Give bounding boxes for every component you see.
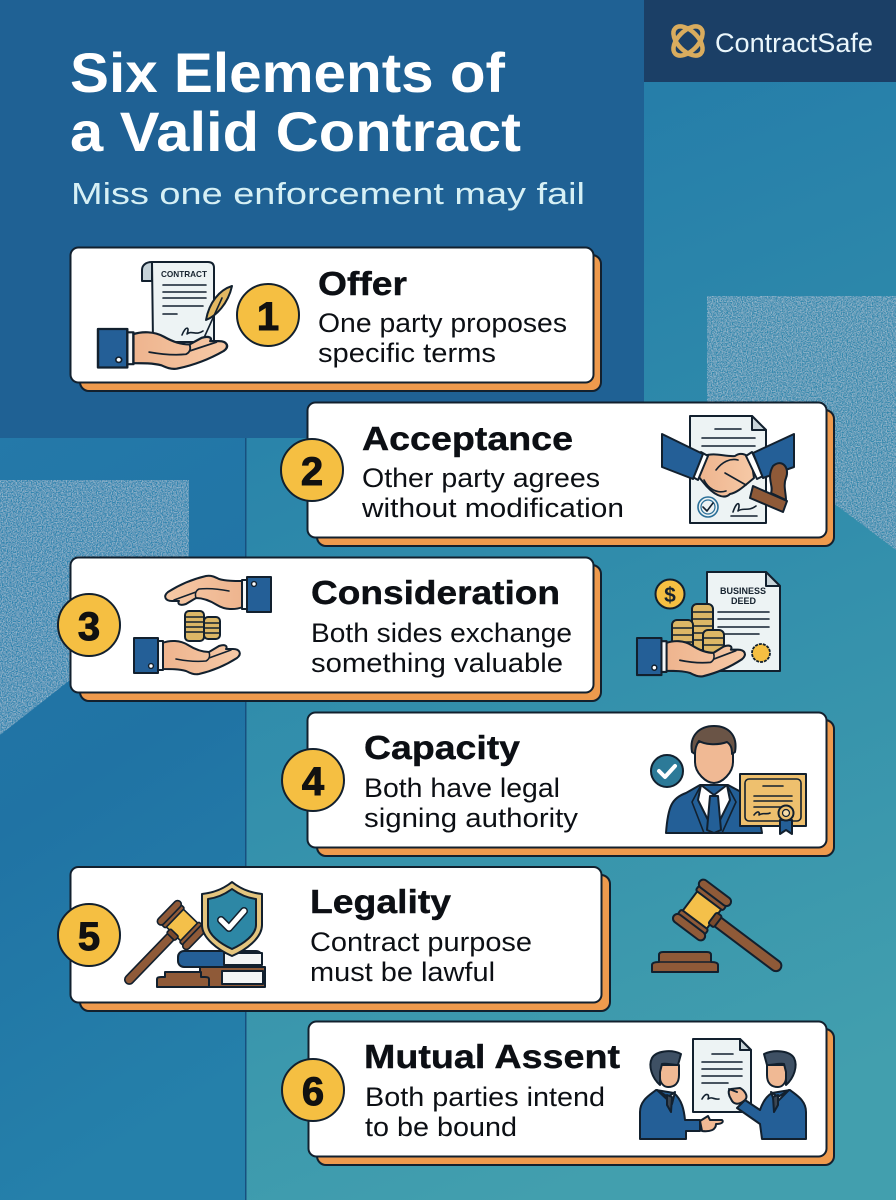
panel: 5 Legality — [58, 867, 610, 1011]
title — [70, 41, 521, 163]
number badge 3: 3 — [78, 605, 100, 649]
text: Consideration: Both sides exchange — [311, 618, 572, 648]
text: Capacity: signing authority — [364, 803, 579, 833]
logo wordmark: ContractSafe — [715, 28, 873, 58]
text: Capacity: Both have legal — [364, 773, 560, 803]
text: Mutual Assent — [364, 1038, 620, 1142]
number badge 3 — [58, 594, 120, 656]
text: Capacity — [364, 729, 579, 833]
title: Six Elements of — [70, 41, 505, 104]
number badge 6: 6 — [302, 1070, 324, 1114]
number badge 5: 5 — [78, 915, 100, 959]
icon: business deed with coins: $ — [664, 584, 676, 607]
icon: business deed with coins: BUSINESS — [720, 586, 766, 596]
icon: gavel — [652, 878, 796, 990]
icon: contract offered on hand — [98, 262, 232, 369]
number badge 2: 2 — [301, 450, 323, 494]
text: Offer: Offer — [318, 265, 407, 302]
text: Offer: One party proposes — [318, 308, 567, 338]
number badge 1 — [237, 284, 299, 346]
text: Acceptance: Acceptance — [362, 420, 573, 457]
text: Acceptance — [361, 420, 624, 523]
icon: two people reviewing document — [640, 1039, 806, 1139]
panel: 4 Capacity — [282, 712, 834, 856]
number badge 6 — [282, 1059, 344, 1121]
text: Legality: must be lawful — [310, 957, 495, 987]
panel: 3 Consideration — [58, 558, 601, 701]
number badge 5 — [58, 904, 120, 966]
icon: gavel shield and books — [111, 882, 265, 998]
text: Offer: specific terms — [318, 338, 496, 368]
text: Consideration: something valuable — [311, 648, 563, 678]
panel: 2 Acceptance — [281, 402, 834, 546]
icon: ContractSafe logo — [668, 21, 708, 61]
text: Acceptance: without modification — [361, 493, 624, 523]
text: Mutual Assent: Both parties intend — [365, 1082, 605, 1112]
number badge 2 — [281, 439, 343, 501]
subtitle: Miss one enforcement may fail — [71, 176, 585, 211]
text: Legality: Contract purpose — [310, 927, 532, 957]
text: Acceptance: Other party agrees — [362, 463, 600, 493]
text: Consideration — [311, 574, 572, 678]
icon: business deed with coins — [637, 572, 780, 676]
panel: 6 Mutual Assent — [282, 1022, 834, 1165]
icon: contract offered on hand: CONTRACT — [161, 269, 208, 279]
icon: business deed with coins: DEED — [731, 596, 756, 606]
number badge 4: 4 — [302, 760, 325, 804]
title: a Valid Contract — [70, 100, 521, 163]
text: Capacity: Capacity — [364, 729, 521, 766]
text: Offer — [318, 265, 567, 368]
icon: handshake over document — [662, 416, 794, 523]
icon: professional with certificate — [651, 726, 806, 834]
text: Mutual Assent: Mutual Assent — [364, 1038, 620, 1075]
text: Legality: Legality — [310, 883, 452, 920]
text: Legality — [310, 883, 532, 987]
panel: 1 Offer — [70, 248, 601, 391]
text: Mutual Assent: to be bound — [365, 1112, 517, 1142]
text: Consideration: Consideration — [311, 574, 560, 611]
icon: hands exchanging coins — [134, 576, 271, 674]
number badge 1: 1 — [257, 295, 279, 339]
number badge 4 — [282, 749, 344, 811]
logo block — [644, 0, 896, 82]
